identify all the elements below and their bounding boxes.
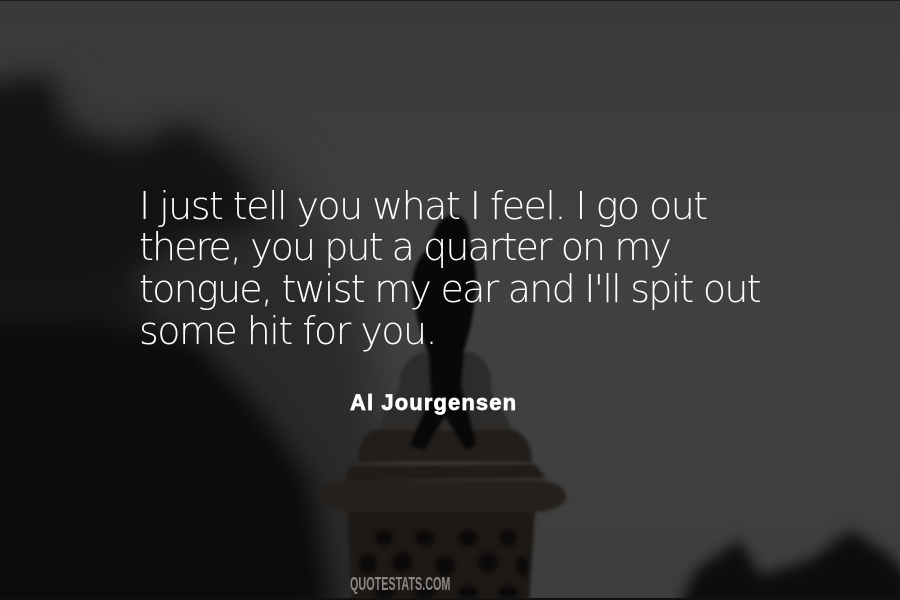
watermark: QUOTESTATS.COM: [350, 574, 450, 594]
text: I just tell you what I feel. I go out: [139, 184, 707, 228]
bird silhouette: [410, 215, 476, 450]
author name: Al Jourgensen: [350, 390, 517, 415]
stone lantern: [322, 352, 566, 600]
text: tongue, twist my ear and I'll spit out: [139, 267, 760, 311]
dark foliage left: [0, 90, 400, 600]
text: there, you put a quarter on my: [139, 225, 670, 269]
dark foliage bottom right: [675, 530, 900, 600]
text: some hit for you.: [139, 309, 436, 353]
photo frame lines: [0, 0, 900, 1]
quote text: [139, 184, 760, 353]
